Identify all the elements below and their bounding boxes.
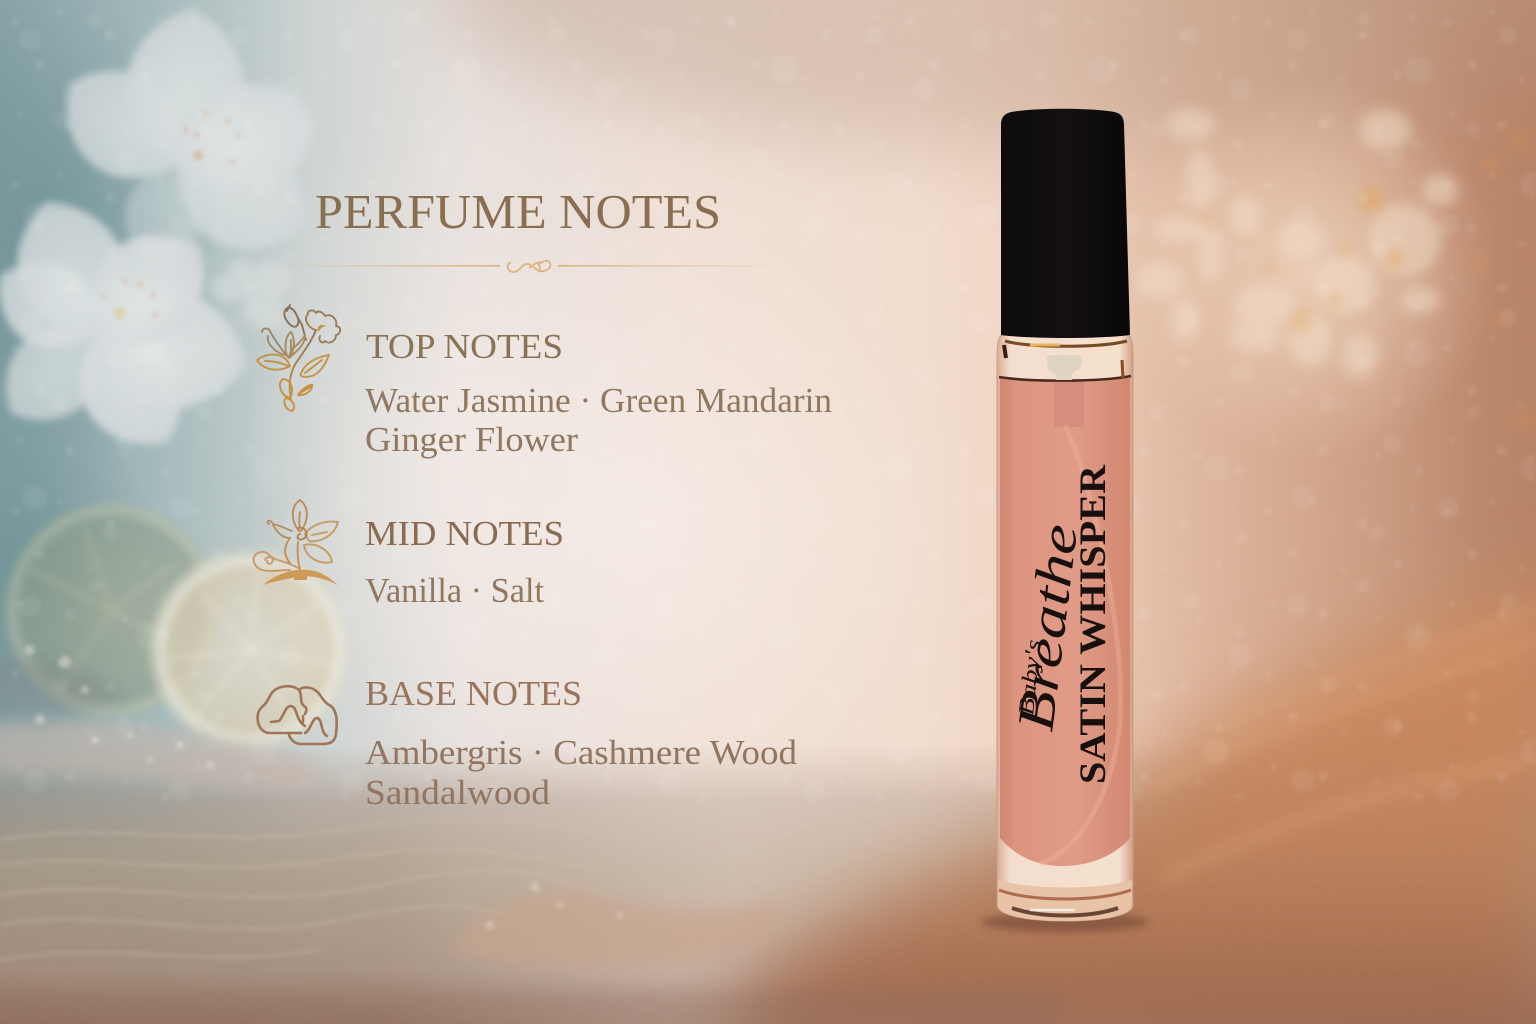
background: salt crystals	[0, 645, 780, 967]
background: floor with ripples	[0, 585, 1536, 1024]
collar highlight	[1005, 341, 1127, 346]
bottle ground shadow	[981, 912, 1149, 932]
bottle base	[998, 880, 1132, 921]
cap	[1001, 109, 1130, 338]
dip tube sheen	[1040, 425, 1120, 864]
label: product name: SATIN WHISPER	[1073, 464, 1114, 784]
ornamental divider	[270, 261, 783, 272]
heading: top notes: TOP NOTES	[366, 327, 563, 366]
small flower	[204, 250, 303, 342]
base notes list: Ambergris · Cashmere Wood	[365, 733, 798, 772]
background: jasmine flowers	[0, 2, 336, 470]
meniscus	[999, 376, 1131, 381]
mid notes list: Vanilla · Salt	[365, 571, 544, 610]
section: mid notes	[254, 500, 564, 610]
label: brand script: Breathe	[1007, 521, 1089, 734]
flower stamens	[101, 112, 240, 319]
section: top notes	[257, 305, 832, 459]
base notes list	[365, 733, 798, 812]
background: citrus slices	[4, 502, 352, 752]
title: PERFUME NOTES	[315, 184, 721, 239]
background: blurred golden flowers right	[1136, 109, 1532, 427]
heading: mid notes: MID NOTES	[365, 514, 564, 553]
liquid	[1000, 377, 1130, 866]
glass body	[997, 335, 1133, 921]
top notes list: Ginger Flower	[365, 420, 578, 459]
label: brand script: Baby's	[1013, 638, 1046, 717]
base notes list: Sandalwood	[365, 773, 551, 812]
lemon slice	[148, 548, 352, 752]
top notes list: Water Jasmine · Green Mandarin	[365, 381, 832, 420]
icon: vanilla flower	[254, 500, 338, 585]
background: central mist over citrus and flowers	[240, 100, 640, 780]
spray pump	[1047, 355, 1084, 427]
icon: botanical sprig	[257, 305, 340, 411]
flower lower	[0, 183, 258, 470]
heading: base notes: BASE NOTES	[365, 674, 582, 713]
lime slice	[4, 502, 220, 718]
top notes list	[365, 381, 832, 459]
perfume bottle	[981, 109, 1149, 932]
icon: ambergris stones	[258, 686, 337, 744]
flower upper	[39, 2, 336, 277]
section: base notes	[258, 674, 798, 812]
